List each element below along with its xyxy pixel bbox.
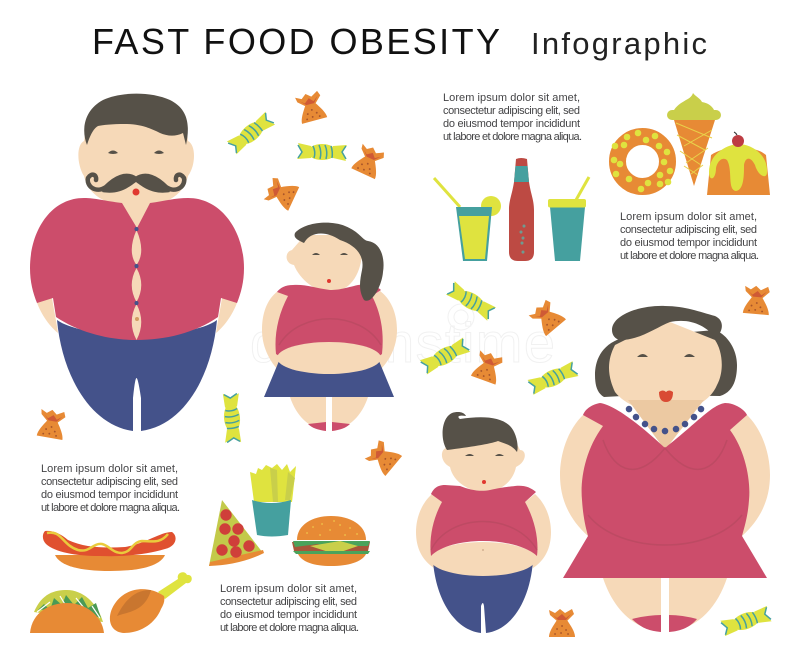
moustache fill — [102, 176, 170, 193]
text block: desserts: ut labore et dolore magna aliqua. — [620, 250, 759, 262]
head — [287, 235, 362, 292]
skirt — [264, 361, 394, 397]
text block: burger: consectetur adipiscing elit, sed — [220, 596, 357, 608]
buttons — [134, 229, 138, 303]
dress — [563, 403, 767, 578]
text block: drinks — [443, 92, 582, 143]
hair — [84, 94, 188, 145]
text block: hot dog — [41, 463, 180, 514]
legs — [290, 397, 368, 431]
pants — [433, 561, 533, 633]
text block: desserts: Lorem ipsum dolor sit amet, — [620, 211, 757, 223]
figure: small woman — [262, 223, 397, 431]
text block: desserts: do eiusmod tempor incididunt — [620, 237, 757, 249]
face details — [312, 253, 348, 255]
hair — [295, 223, 384, 301]
eyes — [108, 150, 164, 154]
icon: donut — [611, 130, 673, 192]
lips — [659, 390, 673, 402]
moustache — [88, 175, 136, 190]
icon: chicken leg — [110, 572, 192, 633]
text block: desserts: consectetur adipiscing elit, sed — [620, 224, 757, 236]
text block: drinks: Lorem ipsum dolor sit amet, — [443, 92, 580, 104]
shirt — [430, 485, 538, 556]
figure: boy — [416, 412, 551, 633]
icon: hamburger — [292, 516, 370, 566]
icon: soft drink cup — [548, 177, 589, 261]
text block: desserts — [620, 211, 759, 262]
arms — [262, 291, 397, 372]
candy: orange — [37, 408, 67, 440]
icon: pudding — [707, 132, 770, 195]
candy: orange — [528, 298, 566, 336]
arms — [416, 494, 551, 568]
figure: large man — [30, 94, 244, 431]
socks — [308, 422, 350, 431]
shirt gaps and belly — [132, 230, 141, 340]
arms — [36, 298, 238, 333]
text block: hot dog: consectetur adipiscing elit, sed — [41, 476, 178, 488]
icon: pizza slice — [209, 500, 264, 566]
shirt — [30, 198, 244, 340]
candy: orange — [549, 609, 575, 637]
navel — [482, 549, 484, 551]
dress folds — [588, 440, 742, 545]
candy: green — [445, 281, 497, 321]
text block: burger: do eiusmod tempor incididunt — [220, 609, 357, 621]
socks — [632, 615, 697, 632]
text block: drinks: do eiusmod tempor incididunt — [443, 118, 580, 130]
eyes — [465, 454, 504, 456]
neck — [628, 400, 704, 450]
candy: green — [419, 336, 471, 376]
icon: taco — [30, 590, 104, 633]
candy: orange — [471, 349, 505, 385]
text block: burger — [220, 583, 359, 634]
text block: drinks: ut labore et dolore magna aliqua. — [443, 131, 582, 143]
candy: orange — [263, 175, 299, 211]
navel — [135, 317, 139, 321]
watermark: dreamstime — [250, 311, 555, 374]
eyes — [637, 354, 695, 357]
belly fold — [279, 319, 381, 345]
text block: burger: Lorem ipsum dolor sit amet, — [220, 583, 357, 595]
icon: juice glass — [434, 178, 501, 261]
belly — [277, 342, 381, 374]
legs — [603, 578, 727, 632]
candy: green — [719, 604, 773, 638]
icon: french fries — [250, 464, 296, 536]
belly — [430, 542, 536, 576]
front hair — [612, 306, 722, 340]
candy: green — [527, 359, 579, 397]
icon: ice cream cone — [667, 93, 721, 186]
candy: orange — [743, 285, 771, 315]
back hair — [595, 330, 737, 397]
candy: orange — [364, 438, 402, 476]
mouth — [132, 188, 140, 196]
candy: green — [221, 392, 243, 444]
arms — [560, 414, 770, 536]
head — [609, 320, 722, 412]
subtitle: Infographic — [531, 26, 707, 61]
text block: hot dog: Lorem ipsum dolor sit amet, — [41, 463, 178, 475]
necklace — [629, 409, 701, 431]
head — [78, 115, 194, 208]
text block: drinks: consectetur adipiscing elit, sed — [443, 105, 580, 117]
head — [442, 430, 525, 492]
icon: soda bottle — [509, 158, 534, 261]
text block: hot dog: do eiusmod tempor incididunt — [41, 489, 178, 501]
text block: hot dog: ut labore et dolore magna aliqua. — [41, 502, 180, 514]
text block: burger: ut labore et dolore magna aliqua. — [220, 622, 359, 634]
shirt — [276, 285, 383, 366]
hair — [443, 412, 518, 452]
mouth — [482, 480, 486, 484]
pants — [57, 320, 217, 431]
mouth — [327, 279, 331, 283]
shirt fold — [431, 522, 537, 550]
candy: orange — [351, 143, 387, 179]
moustache right — [136, 175, 184, 190]
title: FAST FOOD OBESITY — [92, 21, 500, 62]
candy: green — [297, 143, 347, 161]
candy: green — [226, 110, 276, 156]
candy: orange — [295, 90, 327, 124]
figure: large woman — [560, 306, 770, 632]
icon: hot dog — [43, 531, 176, 571]
neck — [118, 198, 154, 232]
